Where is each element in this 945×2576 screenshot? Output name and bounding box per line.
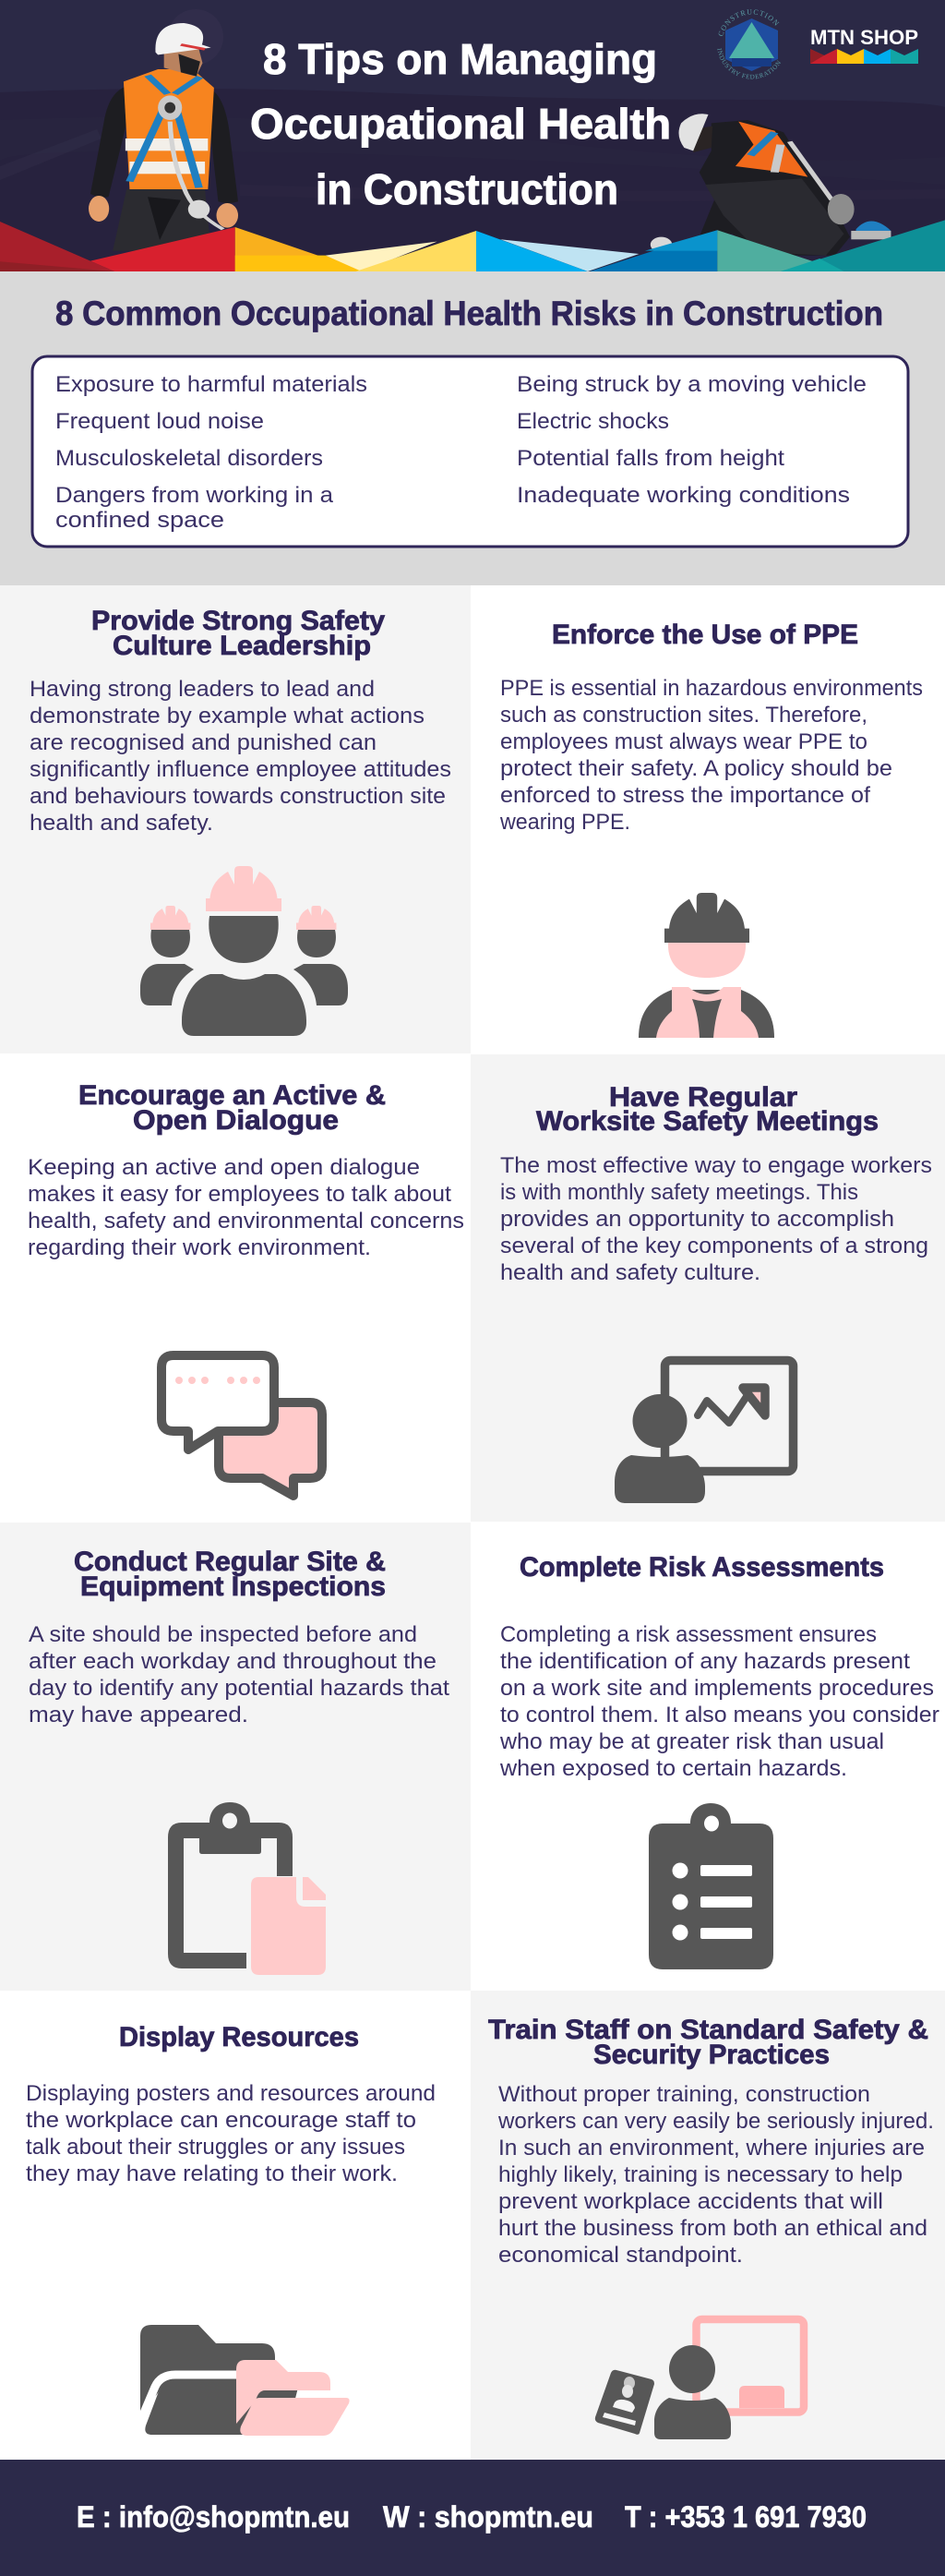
heading: Encourage an Active & [78, 1080, 386, 1111]
body text: protect their safety. A policy should be [500, 756, 892, 781]
body text: are recognised and punished can [30, 730, 377, 755]
icon: clipboard and document [168, 1802, 335, 1978]
body text: Keeping an active and open dialogue [28, 1155, 420, 1180]
body text: Having strong leaders to lead and [30, 677, 375, 702]
body text: on a work site and implements procedures [500, 1676, 934, 1701]
heading: Worksite Safety Meetings [536, 1106, 879, 1137]
footer contact bar [0, 2460, 945, 2576]
body text: who may be at greater risk than usual [499, 1729, 884, 1754]
title [250, 35, 671, 213]
title: Occupational Health [250, 100, 671, 148]
heading [536, 1082, 879, 1137]
body text: day to identify any potential hazards that [29, 1676, 449, 1701]
icon: trainer with board and ID card [595, 2319, 804, 2439]
risks list box: Dangers from working in a [55, 483, 334, 508]
body text [28, 1155, 464, 1260]
heading: Have Regular [609, 1082, 797, 1113]
body text: In such an environment, where injuries are [498, 2136, 925, 2161]
heading: Security Practices [593, 2040, 830, 2070]
body text: employees must always wear PPE to [500, 729, 867, 754]
worker: standing with harness [89, 23, 238, 251]
body text: workers can very easily be seriously injured. [497, 2109, 934, 2134]
body text: wearing PPE. [499, 810, 630, 835]
icon: three workers in helmets [140, 866, 348, 1036]
logo: Construction Industry Federation [717, 9, 781, 79]
body text: to control them. It also means you consider [500, 1703, 939, 1727]
body text: significantly influence employee attitudes [30, 757, 451, 782]
body text [497, 2082, 934, 2268]
body text: regarding their work environment. [28, 1235, 371, 1260]
heading: Provide Strong Safety [91, 606, 385, 636]
body text [30, 677, 451, 836]
coloured triangle band [0, 220, 945, 271]
body text: enforced to stress the importance of [500, 783, 870, 808]
icon: presenter with chart board [615, 1361, 794, 1503]
body text: such as construction sites. Therefore, [500, 703, 867, 728]
heading: Conduct Regular Site & [74, 1547, 386, 1577]
body text: prevent workplace accidents that will [498, 2189, 883, 2214]
risks list box: Frequent loud noise [55, 409, 264, 434]
title: in Construction [316, 165, 618, 213]
icon: worker with helmet and vest [639, 893, 774, 1038]
body text: Displaying posters and resources around [26, 2081, 436, 2106]
heading: Open Dialogue [133, 1105, 339, 1136]
panel: display resources [0, 1991, 471, 2460]
worker: crouching [651, 114, 891, 256]
body text: provides an opportunity to accomplish [500, 1207, 894, 1232]
body text [26, 2081, 436, 2186]
body text: The most effective way to engage workers [500, 1153, 932, 1178]
body text [29, 1622, 449, 1727]
body text [499, 1622, 939, 1781]
logo: MTN Shop [810, 26, 918, 64]
panel: enforce the use of PPE [471, 585, 945, 1054]
logo: Construction Industry Federation: INDUSTRY FEDERATION [717, 48, 781, 79]
body text: Completing a risk assessment ensures [500, 1622, 877, 1647]
panel: provide strong safety culture leadership [0, 585, 471, 1053]
icon: checklist clipboard [649, 1803, 773, 1969]
body text: the identification of any hazards present [500, 1649, 910, 1674]
panel: encourage an active and open dialogue [0, 1053, 471, 1523]
heading: common risks: 8 Common Occupational Health Risks in Construction [55, 295, 883, 332]
risks list box: Being struck by a moving vehicle [517, 372, 867, 397]
footer contact bar: W : shopmtn.eu [383, 2500, 593, 2534]
risks list box: Exposure to harmful materials [55, 372, 367, 397]
risks list box [32, 356, 908, 547]
body text: and behaviours towards construction site [30, 784, 446, 809]
panel: common risks [0, 271, 945, 585]
heading [91, 606, 385, 661]
body text: after each workday and throughout the [29, 1649, 437, 1674]
body text: Without proper training, construction [498, 2082, 870, 2107]
body text: highly likely, training is necessary to help [498, 2162, 903, 2187]
body text: makes it easy for employees to talk about [28, 1182, 451, 1207]
body text: they may have relating to their work. [26, 2161, 398, 2186]
body text [500, 1153, 932, 1285]
body text: talk about their struggles or any issues [26, 2135, 405, 2160]
heading: Display Resources [119, 2022, 359, 2052]
body text: health, safety and environmental concerns [28, 1209, 464, 1234]
risks list box: confined space [55, 508, 224, 533]
header banner [0, 0, 945, 271]
risks list box: Electric shocks [517, 409, 669, 434]
body text: PPE is essential in hazardous environments [500, 676, 923, 701]
heading: Train Staff on Standard Safety & [488, 2015, 928, 2045]
body text: A site should be inspected before and [29, 1622, 417, 1647]
body text: several of the key components of a strong [500, 1234, 928, 1258]
body text: health and safety. [30, 811, 213, 836]
heading [74, 1547, 386, 1602]
body text: when exposed to certain hazards. [499, 1756, 847, 1781]
title: 8 Tips on Managing [263, 35, 657, 83]
heading: Equipment Inspections [80, 1571, 386, 1602]
body text [499, 676, 923, 835]
risks list box: Musculoskeletal disorders [55, 446, 323, 471]
logo: MTN Shop: MTN SHOP [810, 26, 918, 49]
panel: regular site and equipment inspections [0, 1523, 471, 1991]
heading: Enforce the Use of PPE [552, 620, 858, 650]
body text: demonstrate by example what actions [30, 704, 425, 728]
logo: Construction Industry Federation: CONSTRUCTION [718, 9, 779, 36]
heading: Complete Risk Assessments [520, 1552, 884, 1583]
body text: may have appeared. [29, 1703, 248, 1727]
body text: health and safety culture. [500, 1260, 760, 1285]
icon: folders [137, 2325, 350, 2436]
panel: train staff on safety and security [471, 1991, 945, 2460]
body text: the workplace can encourage staff to [26, 2108, 416, 2133]
footer contact bar: T : +353 1 691 7930 [625, 2500, 867, 2534]
body text: hurt the business from both an ethical and [498, 2216, 927, 2241]
panel: complete risk assessments [471, 1522, 945, 1991]
panel: regular worksite safety meetings [471, 1054, 945, 1522]
heading [488, 2015, 928, 2070]
risks list box: Potential falls from height [517, 446, 784, 471]
footer contact bar: E : info@shopmtn.eu [77, 2500, 350, 2534]
icon: speech bubbles [161, 1355, 322, 1496]
body text: is with monthly safety meetings. This [500, 1180, 858, 1205]
heading: Culture Leadership [113, 631, 371, 661]
body text: economical standpoint. [498, 2243, 743, 2268]
heading [78, 1080, 386, 1136]
risks list box: Inadequate working conditions [517, 483, 850, 508]
